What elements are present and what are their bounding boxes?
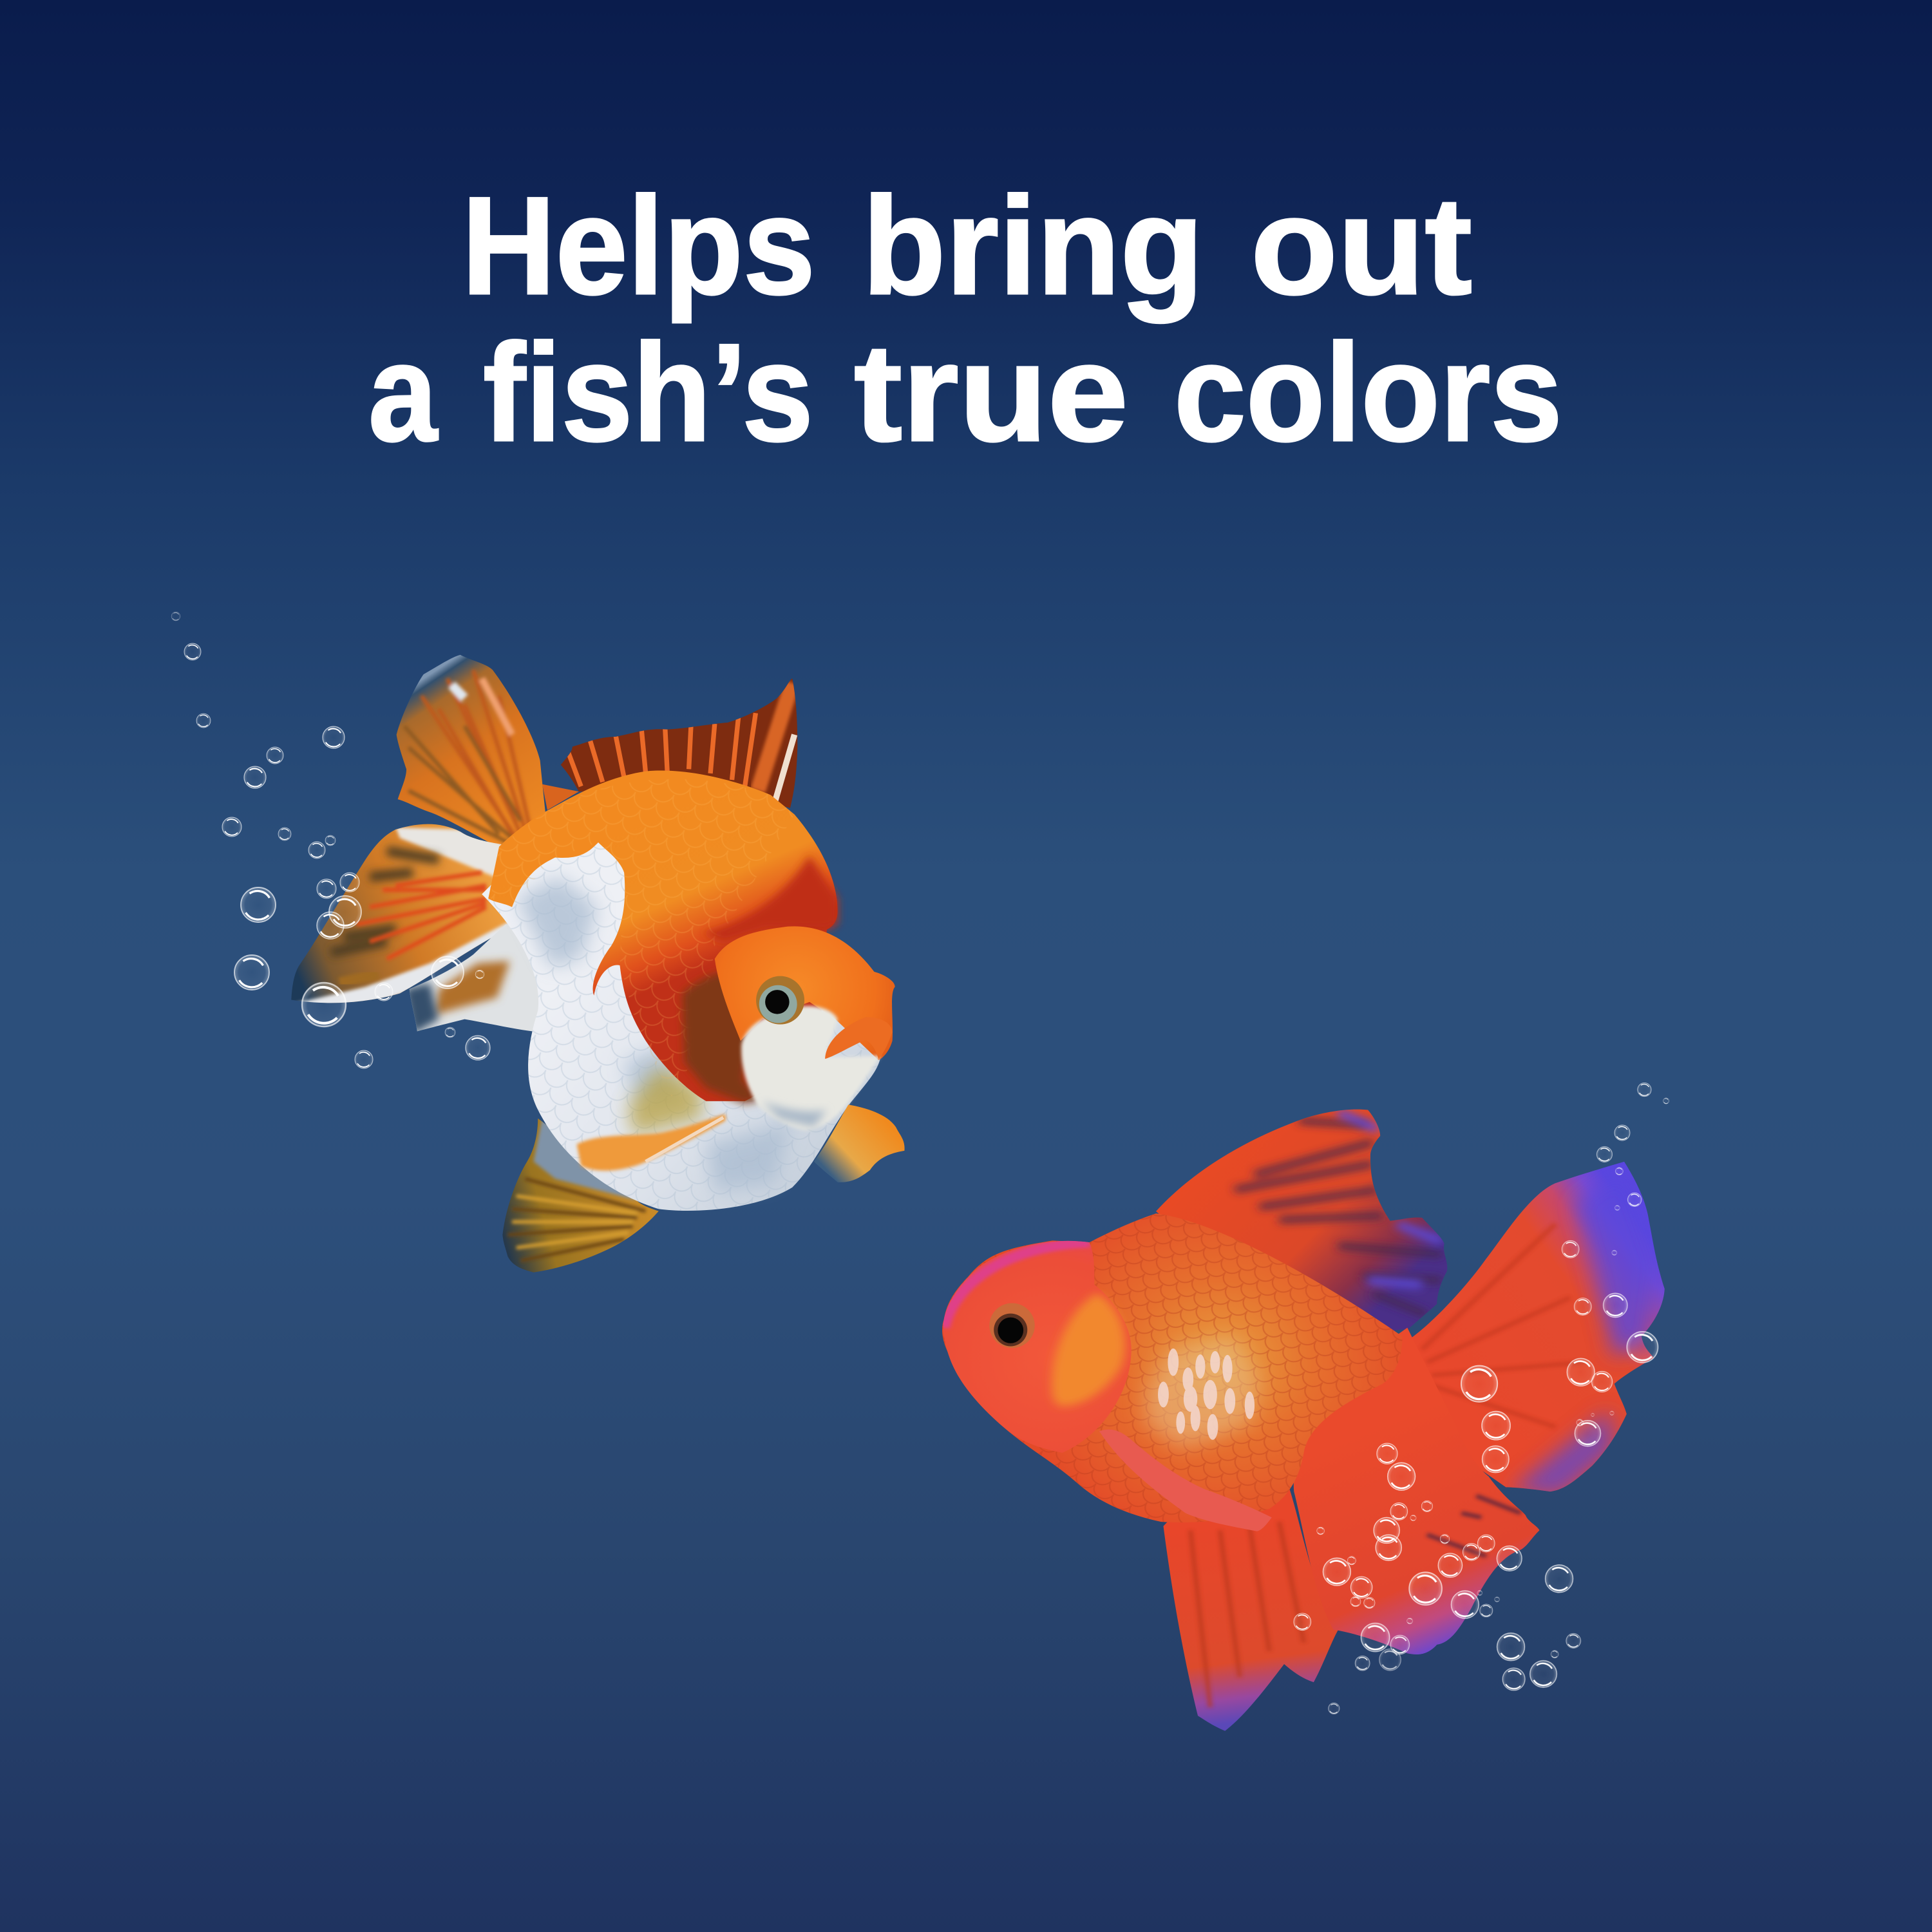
red goldfish <box>942 1110 1665 1731</box>
lips <box>825 1017 893 1059</box>
bubbles right <box>1294 1083 1669 1714</box>
eye <box>756 976 804 1025</box>
body <box>942 1213 1403 1522</box>
lower anal fin <box>1163 1487 1338 1731</box>
title: bring <box>862 167 1204 323</box>
orange back <box>488 770 838 1101</box>
red shadow behind head <box>702 855 838 942</box>
white body <box>482 838 881 1211</box>
silver scales patch <box>1146 1336 1260 1448</box>
title: Helps <box>462 167 815 323</box>
title: fish’s <box>483 314 813 470</box>
lower tail fin <box>291 824 520 1010</box>
rear tail lobe <box>410 924 551 1032</box>
upper tail fin <box>397 655 545 847</box>
orange scales texture <box>491 779 795 1097</box>
scale texture <box>942 1213 1403 1522</box>
white face <box>741 1006 881 1130</box>
head <box>943 1241 1132 1453</box>
right tail lobe <box>1412 1162 1665 1492</box>
brown cheek <box>683 972 762 1103</box>
rear lobe patch <box>404 961 510 1034</box>
pectoral fin right <box>814 1104 905 1182</box>
blue grey flank patches <box>516 877 792 1191</box>
title <box>368 167 1562 470</box>
pink crown <box>944 1242 1090 1328</box>
title: out <box>1251 167 1472 323</box>
yellow belly patch <box>629 1066 702 1135</box>
pectoral fin center <box>577 1114 726 1171</box>
dorsal fin <box>1156 1110 1447 1332</box>
basal fin <box>542 784 579 810</box>
dorsal fin <box>561 679 797 808</box>
silver scales <box>1158 1349 1255 1440</box>
lower tail lobe <box>1294 1328 1539 1654</box>
title: a <box>368 314 439 470</box>
ventral fin <box>502 1119 659 1273</box>
pectoral fin <box>1099 1430 1272 1531</box>
head <box>715 926 895 1060</box>
pectoral fin ray <box>646 1117 723 1162</box>
title: colors <box>1174 314 1562 470</box>
bubbles left <box>171 612 490 1068</box>
body scale texture <box>482 838 881 1211</box>
gill cover <box>1052 1293 1125 1406</box>
eye <box>989 1303 1035 1348</box>
orange and white goldfish <box>291 655 905 1273</box>
title: true <box>854 314 1128 470</box>
face shading <box>762 1101 827 1127</box>
